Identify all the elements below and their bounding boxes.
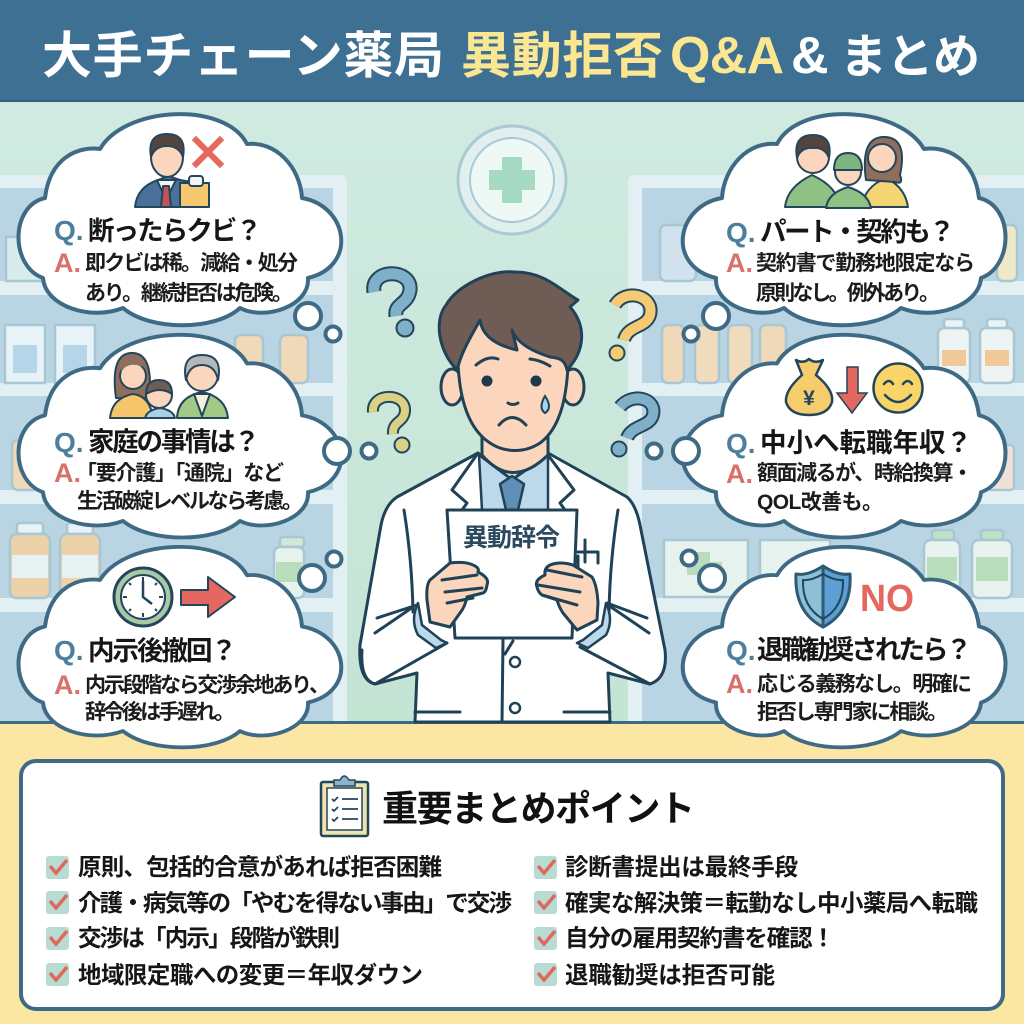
hands xyxy=(427,562,488,627)
thought cloud: Q6 退職勧奨 xyxy=(682,547,1006,747)
question marks xyxy=(373,274,653,456)
text: Q3 answer: A. xyxy=(54,670,81,700)
text: Q4 answer xyxy=(726,248,975,305)
checklist right column: 診断書提出は最終手段 xyxy=(565,854,798,880)
icon: family xyxy=(110,353,228,418)
icon: money bag, down arrow, smiley xyxy=(786,359,922,415)
checklist left column: 介護・病気等の「やむを得ない事由」で交渉 xyxy=(78,890,512,916)
header band xyxy=(0,0,1024,102)
thought cloud: Q1 断ったらクビ xyxy=(18,114,341,342)
title: & xyxy=(791,27,829,85)
title: まとめ xyxy=(840,30,980,83)
text: Q4 answer: 契約書で勤務地限定なら xyxy=(756,252,975,275)
text: Q6 question: Q. xyxy=(726,635,756,666)
thought cloud: Q5 中小へ転職年収 xyxy=(646,335,1006,538)
text: Q1 answer: A. xyxy=(54,248,81,278)
thought cloud: Q5 中小へ転職年収: 中小へ転職年収？ xyxy=(760,428,972,458)
ears xyxy=(441,369,463,405)
icon: shield and NO xyxy=(796,566,914,627)
text: Q4 question: Q. xyxy=(726,217,756,248)
checklist right column: 確実な解決策＝転勤なし中小薬局へ転職 xyxy=(565,890,978,916)
thought cloud: Q3 内示後撤回: 内示後撤回？ xyxy=(88,636,237,666)
text: Q1 question: Q. xyxy=(54,215,84,246)
document xyxy=(447,510,577,638)
icon: part-time staff trio xyxy=(785,135,908,208)
text: Q3 answer: 辞令後は手遅れ。 xyxy=(85,701,235,724)
summary panel xyxy=(21,761,1003,1009)
facial features xyxy=(476,358,550,425)
checklist right column xyxy=(534,854,978,988)
neck xyxy=(482,430,548,472)
text: Q5 answer: 額面減るが、時給換算・ xyxy=(757,461,973,485)
hair xyxy=(439,272,582,370)
text: Q2 question: Q. xyxy=(54,427,84,458)
thought cloud: Q6 退職勧奨: 退職勧奨されたら？ xyxy=(757,635,972,665)
icon: businessman with paper bag and cross xyxy=(135,134,220,207)
summary heading: 重要まとめポイント xyxy=(382,788,695,829)
text: Q3 answer: 内示段階なら交渉余地あり、 xyxy=(85,674,330,697)
icon: money bag, down arrow, smiley: ¥ xyxy=(803,387,815,410)
document text: 異動辞令 xyxy=(463,524,560,552)
thought cloud: Q3 内示後撤回 xyxy=(18,547,342,747)
pharmacy shelves right xyxy=(628,175,1024,725)
icon: medical cross sign xyxy=(458,126,566,234)
face xyxy=(458,310,568,450)
text: Q6 answer: 応じる義務なし。明確に xyxy=(757,673,972,696)
text: Q4 answer: 原則なし。例外あり。 xyxy=(756,282,940,305)
checklist right column: 退職勧奨は拒否可能 xyxy=(565,962,775,988)
checklist left column: 地域限定職への変更＝年収ダウン xyxy=(78,961,423,988)
title: Q&A xyxy=(670,27,784,85)
thought cloud: Q1 断ったらクビ: 断ったらクビ？ xyxy=(88,216,262,246)
text: Q2 answer xyxy=(54,458,303,513)
floor and summary background xyxy=(0,721,1024,1024)
background wall xyxy=(0,100,1024,725)
lab coat xyxy=(360,453,665,722)
text: Q3 question: Q. xyxy=(54,635,84,666)
text: Q4 answer: A. xyxy=(726,248,753,278)
thought cloud: Q4 パート・契約 xyxy=(683,114,1006,342)
checklist left column xyxy=(46,853,512,988)
icon: clock and arrow xyxy=(114,568,235,626)
text: Q1 answer xyxy=(54,248,298,305)
text: Q2 answer: A. xyxy=(54,458,81,488)
thought cloud: Q2 家庭の事情 xyxy=(18,335,377,538)
pharmacy shelves left xyxy=(0,175,347,725)
text: Q2 answer: 生活破綻レベルなら考慮。 xyxy=(77,490,303,513)
title: 大手チェーン薬局 xyxy=(42,28,444,84)
text: Q6 answer: 拒否し専門家に相談。 xyxy=(757,701,948,724)
pen xyxy=(578,540,598,572)
text: Q2 answer: 「要介護」「通院」など xyxy=(76,462,284,485)
text: Q5 answer xyxy=(726,459,973,514)
text: Q5 answer: A. xyxy=(726,459,753,489)
checklist left column: 交渉は「内示」段階が鉄則 xyxy=(78,924,340,951)
text: Q1 answer: あり。継続拒否は危険。 xyxy=(85,282,293,305)
text: Q3 answer xyxy=(54,670,330,724)
shirt cuffs xyxy=(414,603,610,648)
text: Q5 question: Q. xyxy=(726,428,756,459)
pharmacist character xyxy=(360,272,665,722)
text: Q6 answer: A. xyxy=(726,669,753,699)
thought cloud: Q4 パート・契約: パート・契約も？ xyxy=(760,217,955,247)
checklist right column: 自分の雇用契約書を確認！ xyxy=(565,925,835,951)
checklist left column: 原則、包括的合意があれば拒否困難 xyxy=(78,853,442,880)
text: Q6 answer xyxy=(726,669,972,724)
text: Q5 answer: QOL改善も。 xyxy=(757,491,883,514)
text: Q1 answer: 即クビは稀。減給・処分 xyxy=(85,251,298,275)
title: 異動拒否 xyxy=(461,28,663,84)
icon: shield and NO: NO xyxy=(860,578,914,620)
thought cloud: Q2 家庭の事情: 家庭の事情は？ xyxy=(88,427,260,457)
shirt and tie xyxy=(479,455,548,510)
icon: clipboard xyxy=(321,776,368,836)
